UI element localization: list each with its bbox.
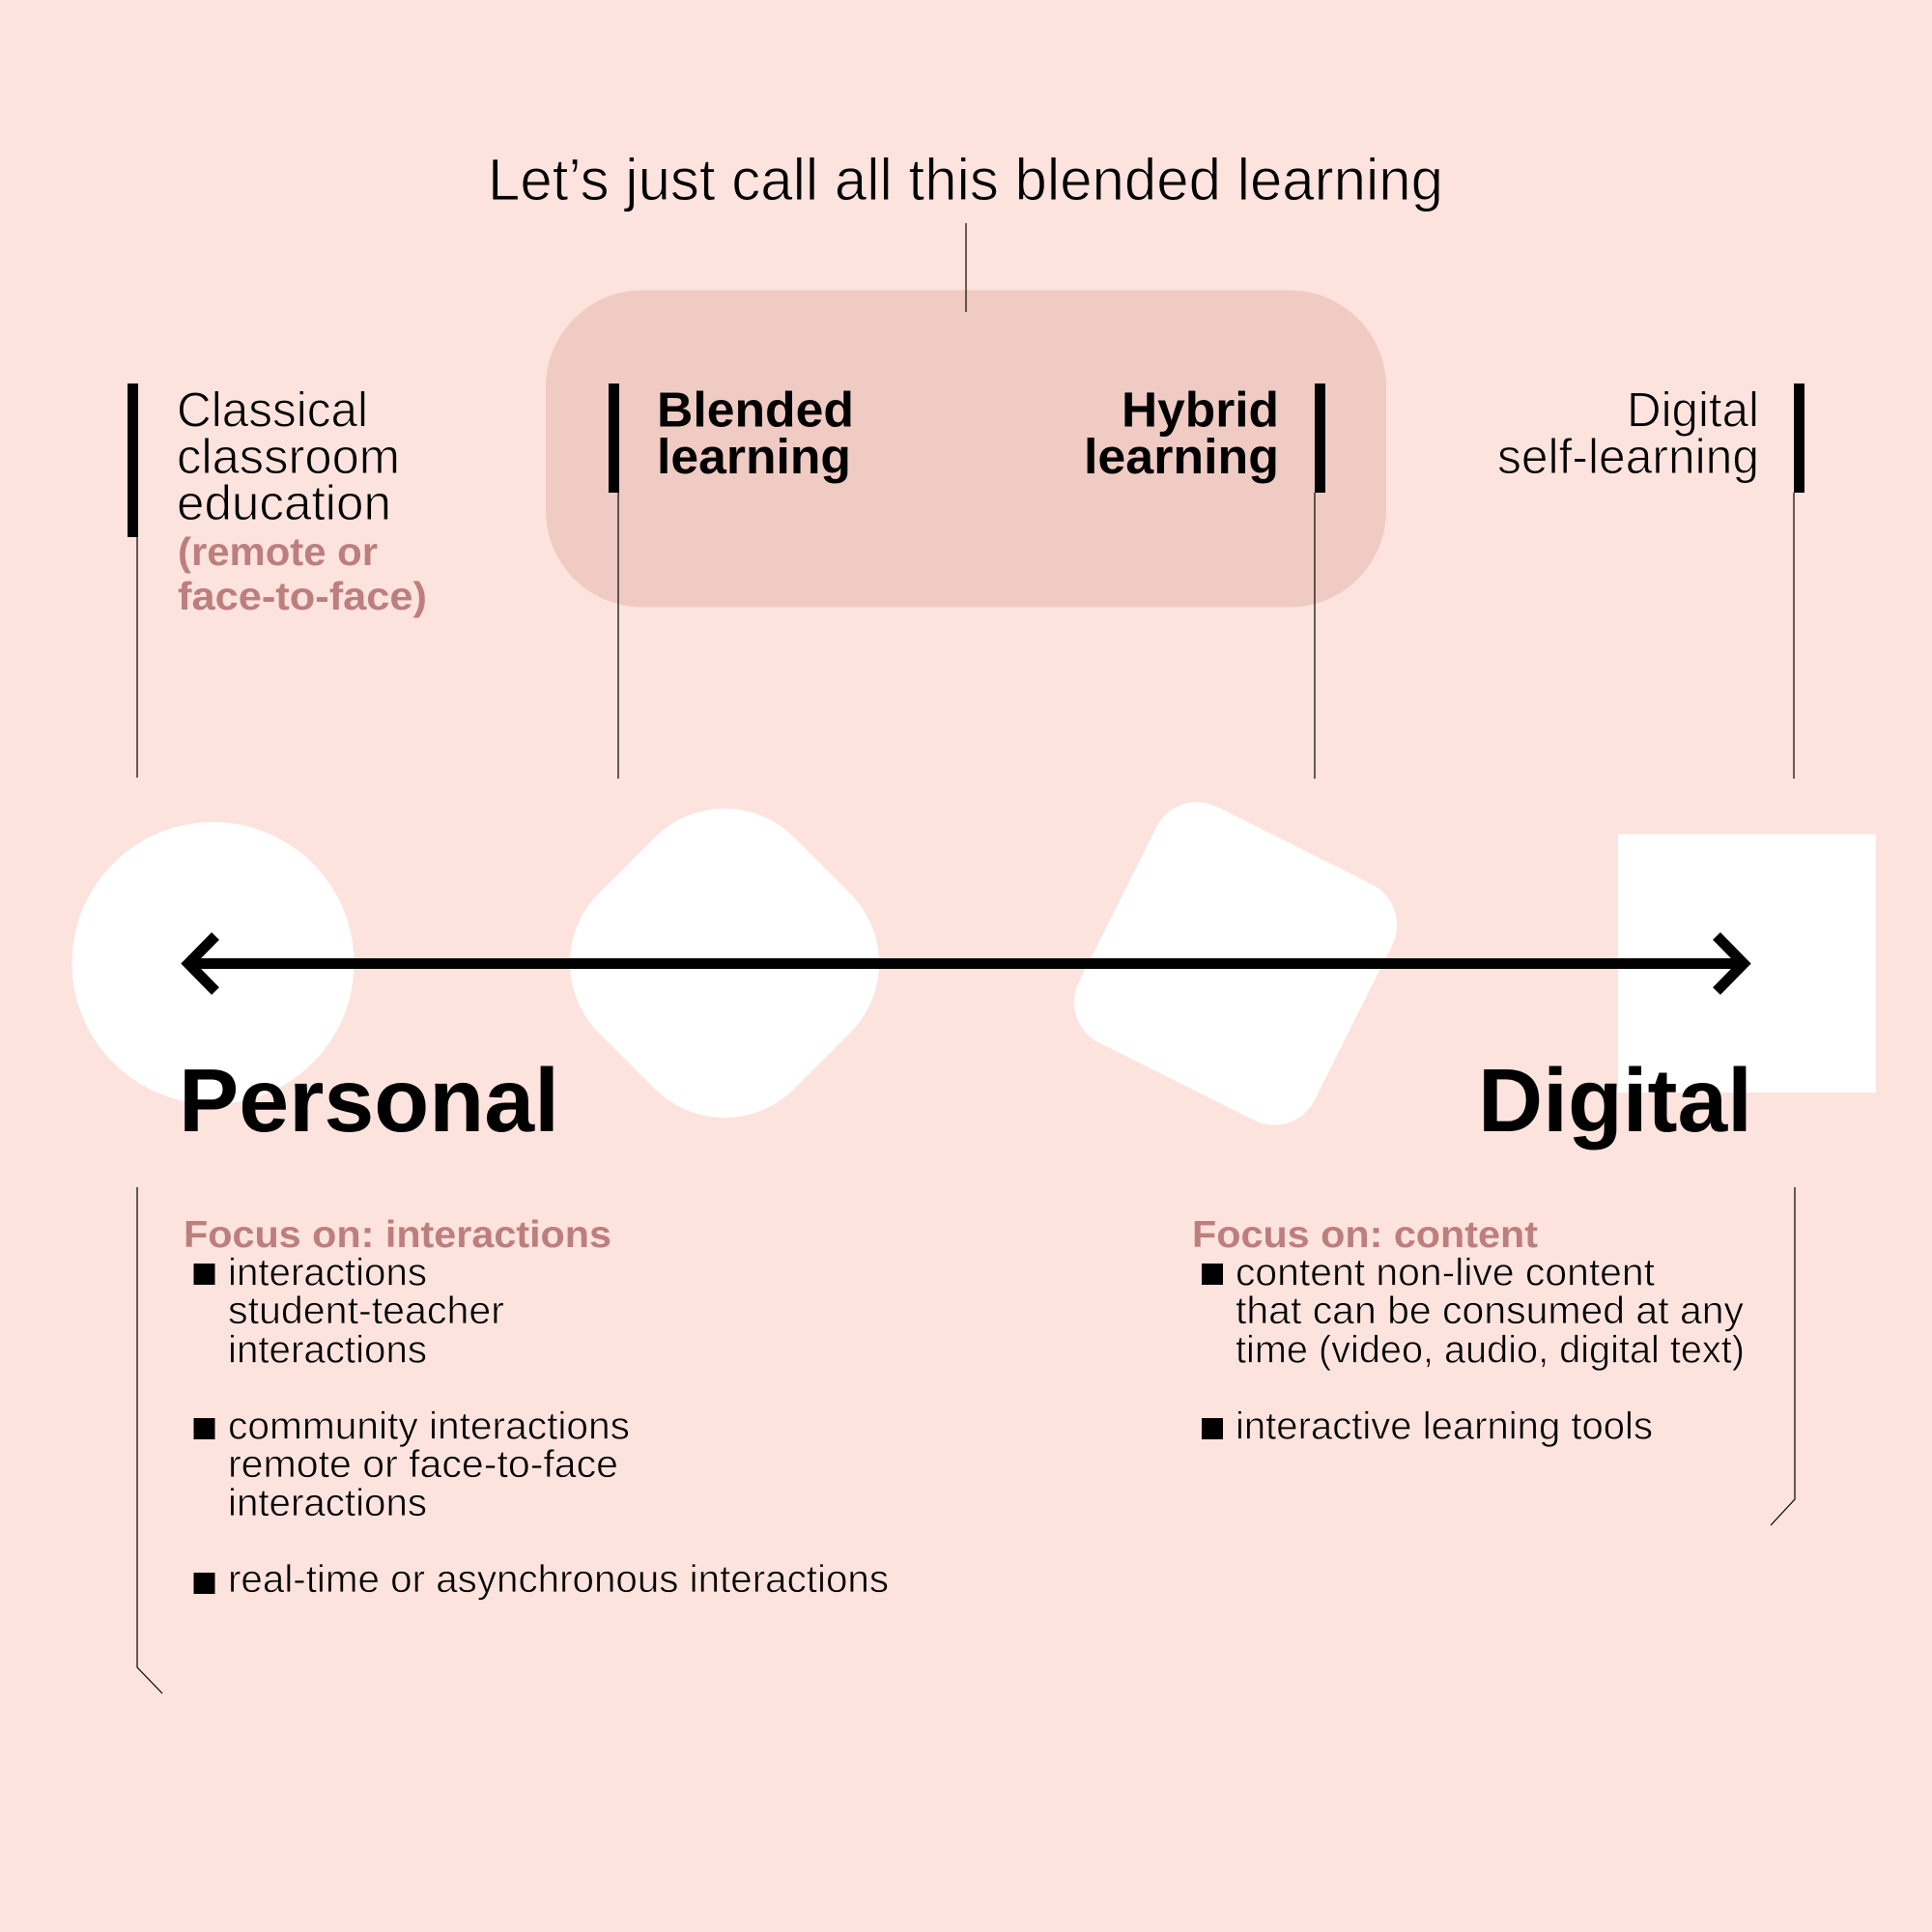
label: digital self-learning: Digital [1627,383,1759,437]
label: hybrid learning: learning [1084,429,1279,484]
bullet: community interactions: community interactions [228,1405,630,1447]
label: blended learning [657,383,854,484]
bullet: community interactions [193,1405,630,1524]
bullet: interactive learning tools: interactive learning tools [1236,1405,1653,1447]
bullet: community interactions: interactions [228,1482,427,1524]
label: hybrid learning: Hybrid [1122,383,1279,437]
bullet: content: that can be consumed at any [1236,1290,1744,1332]
bullet: content: time (video, audio, digital text) [1236,1329,1745,1372]
bullet: student-teacher interactions [193,1252,504,1372]
panel: focus on content [1192,1214,1745,1447]
double-headed arrow [188,936,1744,991]
label: blended learning: learning [657,429,851,484]
label: classical classroom education: education [177,475,391,530]
label: digital self-learning [1497,383,1759,484]
label: classical classroom education [177,383,427,618]
label: digital self-learning: self-learning [1497,429,1759,484]
title connector line [965,223,967,312]
blended learning highlight pill [546,290,1386,607]
bullet: real-time or asynchronous: real-time or asynchronous interactions [228,1558,889,1601]
marker: classical classroom education [128,384,138,778]
subheading: focus on content: Focus on: content [1192,1214,1538,1256]
label: classical classroom education: face-to-face) [178,574,427,618]
marker: hybrid learning [1315,384,1325,779]
heading: digital: Digital [1478,1050,1752,1151]
bullet: content [1202,1252,1745,1372]
heading: personal: Personal [179,1050,559,1151]
marker: digital self-learning [1794,384,1804,779]
label: classical classroom education: classroom [177,429,400,484]
panel: focus on interactions [184,1214,889,1601]
bullet: community interactions: remote or face-to-face [228,1443,618,1486]
label: hybrid learning [1084,383,1279,484]
bullet: student-teacher interactions: interactions [228,1252,427,1294]
bracket: digital column [1771,1187,1795,1525]
shape: tilted rounded square [1059,786,1412,1141]
bracket: personal column [137,1187,162,1693]
subheading: focus on interactions: Focus on: interactions [184,1214,611,1256]
label: blended learning: Blended [657,383,854,437]
title: Let’s just call all this blended learning [488,147,1443,213]
shape: square [1618,835,1876,1093]
shape: rounded diamond [529,768,920,1158]
bullet: content: content non-live content [1236,1252,1655,1294]
label: classical classroom education: (remote or [178,529,378,574]
label: classical classroom education: Classical [177,383,368,437]
bullet: student-teacher interactions: student-teacher [228,1290,504,1332]
marker: blended learning [609,384,619,779]
bullet: student-teacher interactions: interactions [228,1329,427,1372]
shape: circle [71,822,354,1104]
